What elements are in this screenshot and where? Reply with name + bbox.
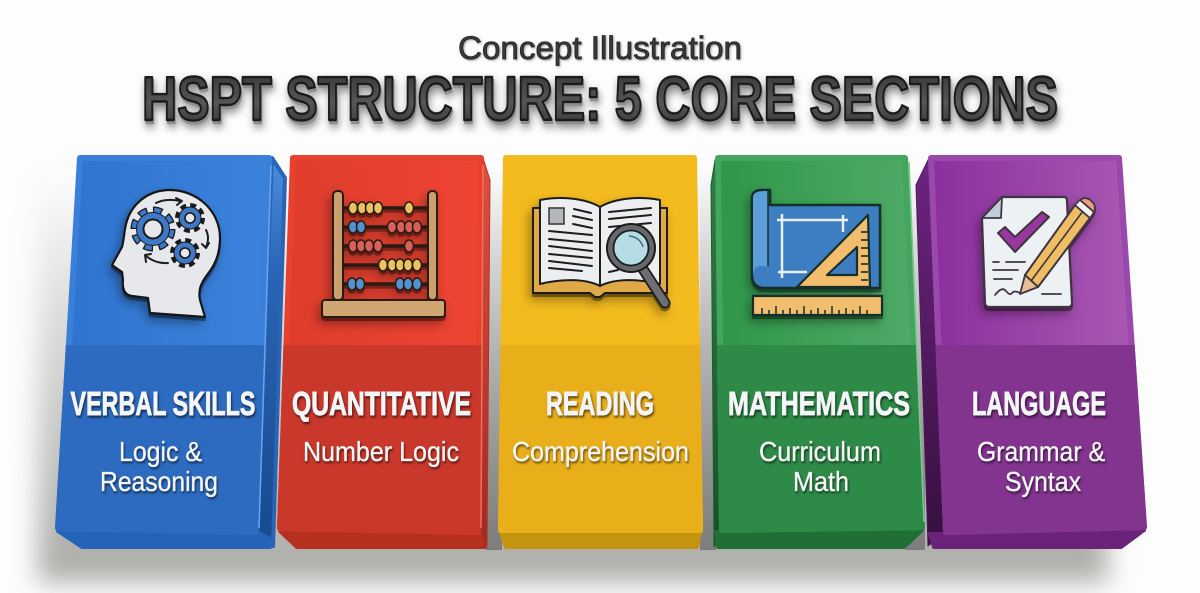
label: QUANTITATIVE: QUANTITATIVE (292, 385, 471, 422)
icon: head with gears (112, 190, 220, 317)
icon: abacus (322, 191, 445, 317)
description: Grammar & Syntax: Grammar & (977, 436, 1105, 467)
description: Curriculum Math: Math (793, 466, 849, 497)
icon: open book with magnifier (533, 198, 667, 303)
panel: quantitative (280, 158, 490, 547)
subtitle: Concept Illustration: Concept Illustration (458, 30, 742, 66)
label: MATHEMATICS: MATHEMATICS (728, 385, 910, 422)
description: Number Logic: Number Logic (303, 436, 459, 467)
panel: language (916, 158, 1144, 547)
description: Logic & Reasoning (100, 436, 218, 497)
panel: verbal skills (58, 158, 285, 547)
icon: blueprint, set square and ruler (752, 190, 882, 315)
label: LANGUAGE: LANGUAGE (972, 385, 1106, 422)
description: Curriculum Math (759, 436, 881, 497)
description: Curriculum Math: Curriculum (759, 436, 881, 467)
description: Logic & Reasoning: Logic & (119, 436, 202, 467)
panel: mathematics (711, 158, 924, 547)
panel: reading (501, 158, 700, 547)
description: Logic & Reasoning: Reasoning (100, 466, 218, 497)
description: Grammar & Syntax: Syntax (1005, 466, 1081, 497)
label: VERBAL SKILLS: VERBAL SKILLS (70, 385, 256, 422)
label: READING: READING (546, 385, 654, 422)
icon: checked document with pencil (982, 197, 1095, 307)
description: Comprehension: Comprehension (512, 436, 689, 467)
description: Grammar & Syntax (977, 436, 1105, 497)
